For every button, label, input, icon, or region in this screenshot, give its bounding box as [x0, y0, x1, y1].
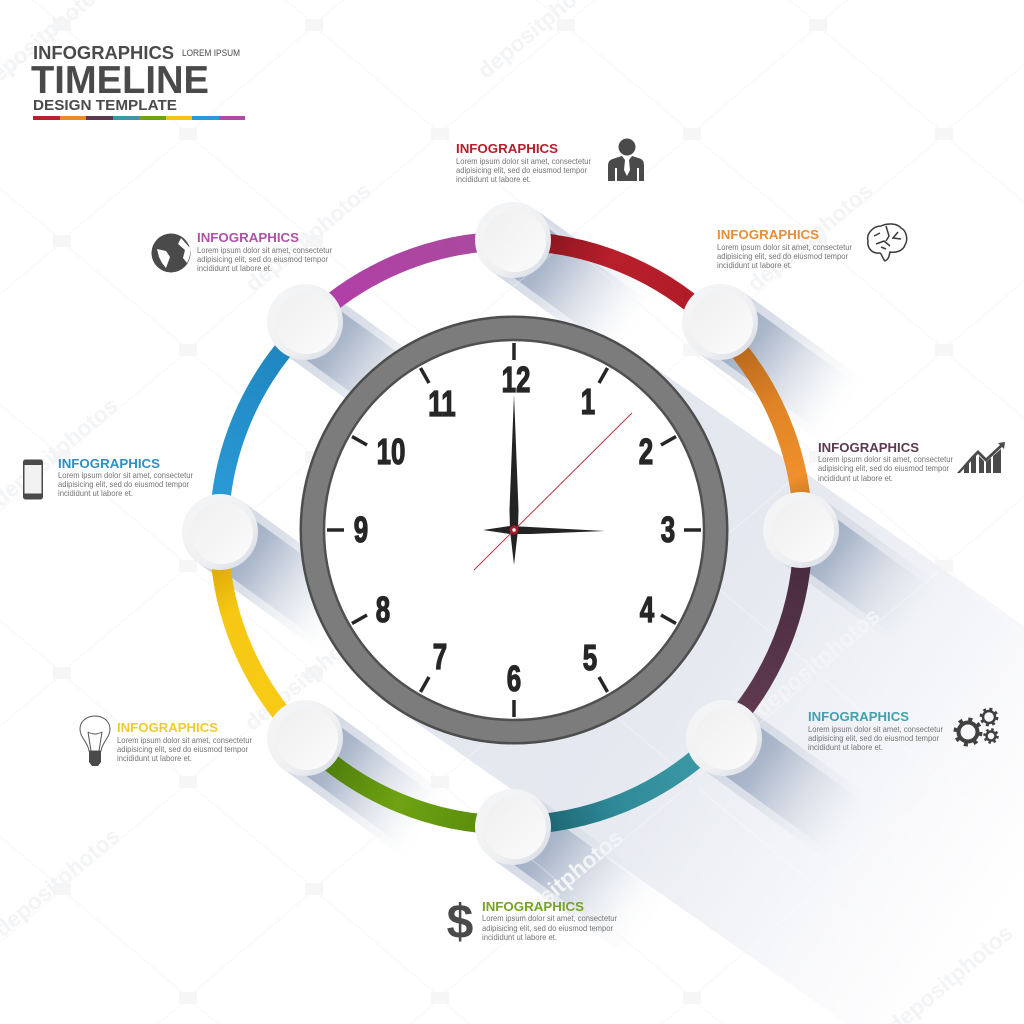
text: blue: incididunt ut labore et.: [58, 488, 133, 498]
text: teal: INFOGRAPHICS: [808, 709, 909, 724]
text: orange: adipisicing elit, sed do eiusmod tempor: [717, 251, 848, 261]
clock numerals: [354, 360, 675, 699]
watermark overlay: depositphotos: [750, 603, 885, 722]
title block: DESIGN TEMPLATE: [33, 98, 177, 114]
text: red: INFOGRAPHICS: [456, 141, 558, 156]
text: plum: adipisicing elit, sed do eiusmod tempor: [818, 463, 949, 473]
text: teal: Lorem ipsum dolor sit amet, consectetur: [808, 724, 943, 734]
text: yellow: INFOGRAPHICS: [117, 720, 218, 735]
text: purple: [197, 230, 332, 273]
title block: [31, 42, 245, 120]
white timeline nodes: [182, 202, 839, 865]
clock numerals: 1: [581, 382, 595, 422]
icon: globe: [152, 234, 190, 272]
clock tick marks: [327, 343, 701, 717]
text: red: [456, 141, 591, 184]
text: green: [482, 899, 617, 942]
watermark overlay: depositphotos: [241, 178, 376, 297]
title block: LOREM IPSUM: [182, 48, 240, 58]
icon: dollar: $: [447, 896, 474, 949]
icon: light bulb: [80, 716, 110, 766]
clock numerals: 3: [661, 510, 675, 550]
clock numerals: 6: [507, 659, 521, 699]
watermark overlay: depositphotos: [493, 400, 628, 519]
text: blue: [58, 456, 193, 498]
icon: growth chart: [957, 442, 1005, 473]
text: yellow: Lorem ipsum dolor sit amet, consectetur: [117, 735, 252, 745]
text: green: INFOGRAPHICS: [482, 899, 584, 914]
clock numerals: 4: [640, 590, 655, 630]
text: yellow: incididunt ut labore et.: [117, 753, 192, 763]
text: green: incididunt ut labore et.: [482, 932, 557, 942]
text: blue: INFOGRAPHICS: [58, 456, 160, 471]
clock numerals: 5: [583, 638, 597, 678]
text: plum: [818, 440, 953, 483]
icon: smartphone: [23, 460, 43, 500]
clock long shadow: [391, 355, 1024, 1024]
text: orange: INFOGRAPHICS: [717, 227, 819, 242]
icon: gears: [956, 709, 998, 744]
text: purple: INFOGRAPHICS: [197, 230, 299, 245]
node long shadows: [198, 209, 961, 958]
clock numerals: 2: [639, 432, 653, 472]
text: blue: Lorem ipsum dolor sit amet, consectetur: [58, 470, 193, 480]
text: purple: incididunt ut labore et.: [197, 263, 272, 273]
text: yellow: [117, 720, 252, 763]
text: teal: [808, 709, 943, 752]
clock numerals: 8: [376, 590, 390, 630]
title block: INFOGRAPHICS: [33, 42, 174, 63]
clock numerals: 7: [433, 637, 447, 677]
text: purple: Lorem ipsum dolor sit amet, consectetur: [197, 245, 332, 255]
text: red: adipisicing elit, sed do eiusmod tempor: [456, 165, 587, 175]
text: blue: adipisicing elit, sed do eiusmod tempor: [58, 479, 189, 489]
text: green: adipisicing elit, sed do eiusmod tempor: [482, 923, 613, 933]
coloured ring segments: [219, 241, 803, 825]
icon: brain: [868, 224, 907, 261]
title block: TIMELINE: [31, 59, 209, 102]
clock rim and face: [301, 317, 727, 743]
text: green: Lorem ipsum dolor sit amet, consectetur: [482, 913, 617, 923]
clock hands: [474, 394, 632, 570]
text: orange: [717, 227, 852, 270]
text: red: incididunt ut labore et.: [456, 174, 531, 184]
clock numerals: 12: [502, 360, 530, 400]
watermark overlay: depositphotos: [493, 825, 628, 944]
clock numerals: 11: [428, 384, 456, 424]
text: plum: incididunt ut labore et.: [818, 473, 893, 483]
text: plum: Lorem ipsum dolor sit amet, consectetur: [818, 454, 953, 464]
text: yellow: adipisicing elit, sed do eiusmod tempor: [117, 744, 248, 754]
text: purple: adipisicing elit, sed do eiusmod tempor: [197, 254, 328, 264]
watermark overlay: depositphotos: [240, 617, 375, 736]
clock numerals: 9: [354, 510, 368, 550]
text: red: Lorem ipsum dolor sit amet, consectetur: [456, 156, 591, 166]
watermark overlay: depositphotos: [743, 178, 878, 297]
text: teal: adipisicing elit, sed do eiusmod tempor: [808, 733, 939, 743]
text: orange: incididunt ut labore et.: [717, 260, 792, 270]
clock: [301, 317, 727, 743]
text: orange: Lorem ipsum dolor sit amet, consectetur: [717, 242, 852, 252]
icon: businessman: [608, 138, 644, 181]
clock numerals: 10: [377, 432, 405, 472]
text: teal: incididunt ut labore et.: [808, 742, 883, 752]
text: plum: INFOGRAPHICS: [818, 440, 919, 455]
